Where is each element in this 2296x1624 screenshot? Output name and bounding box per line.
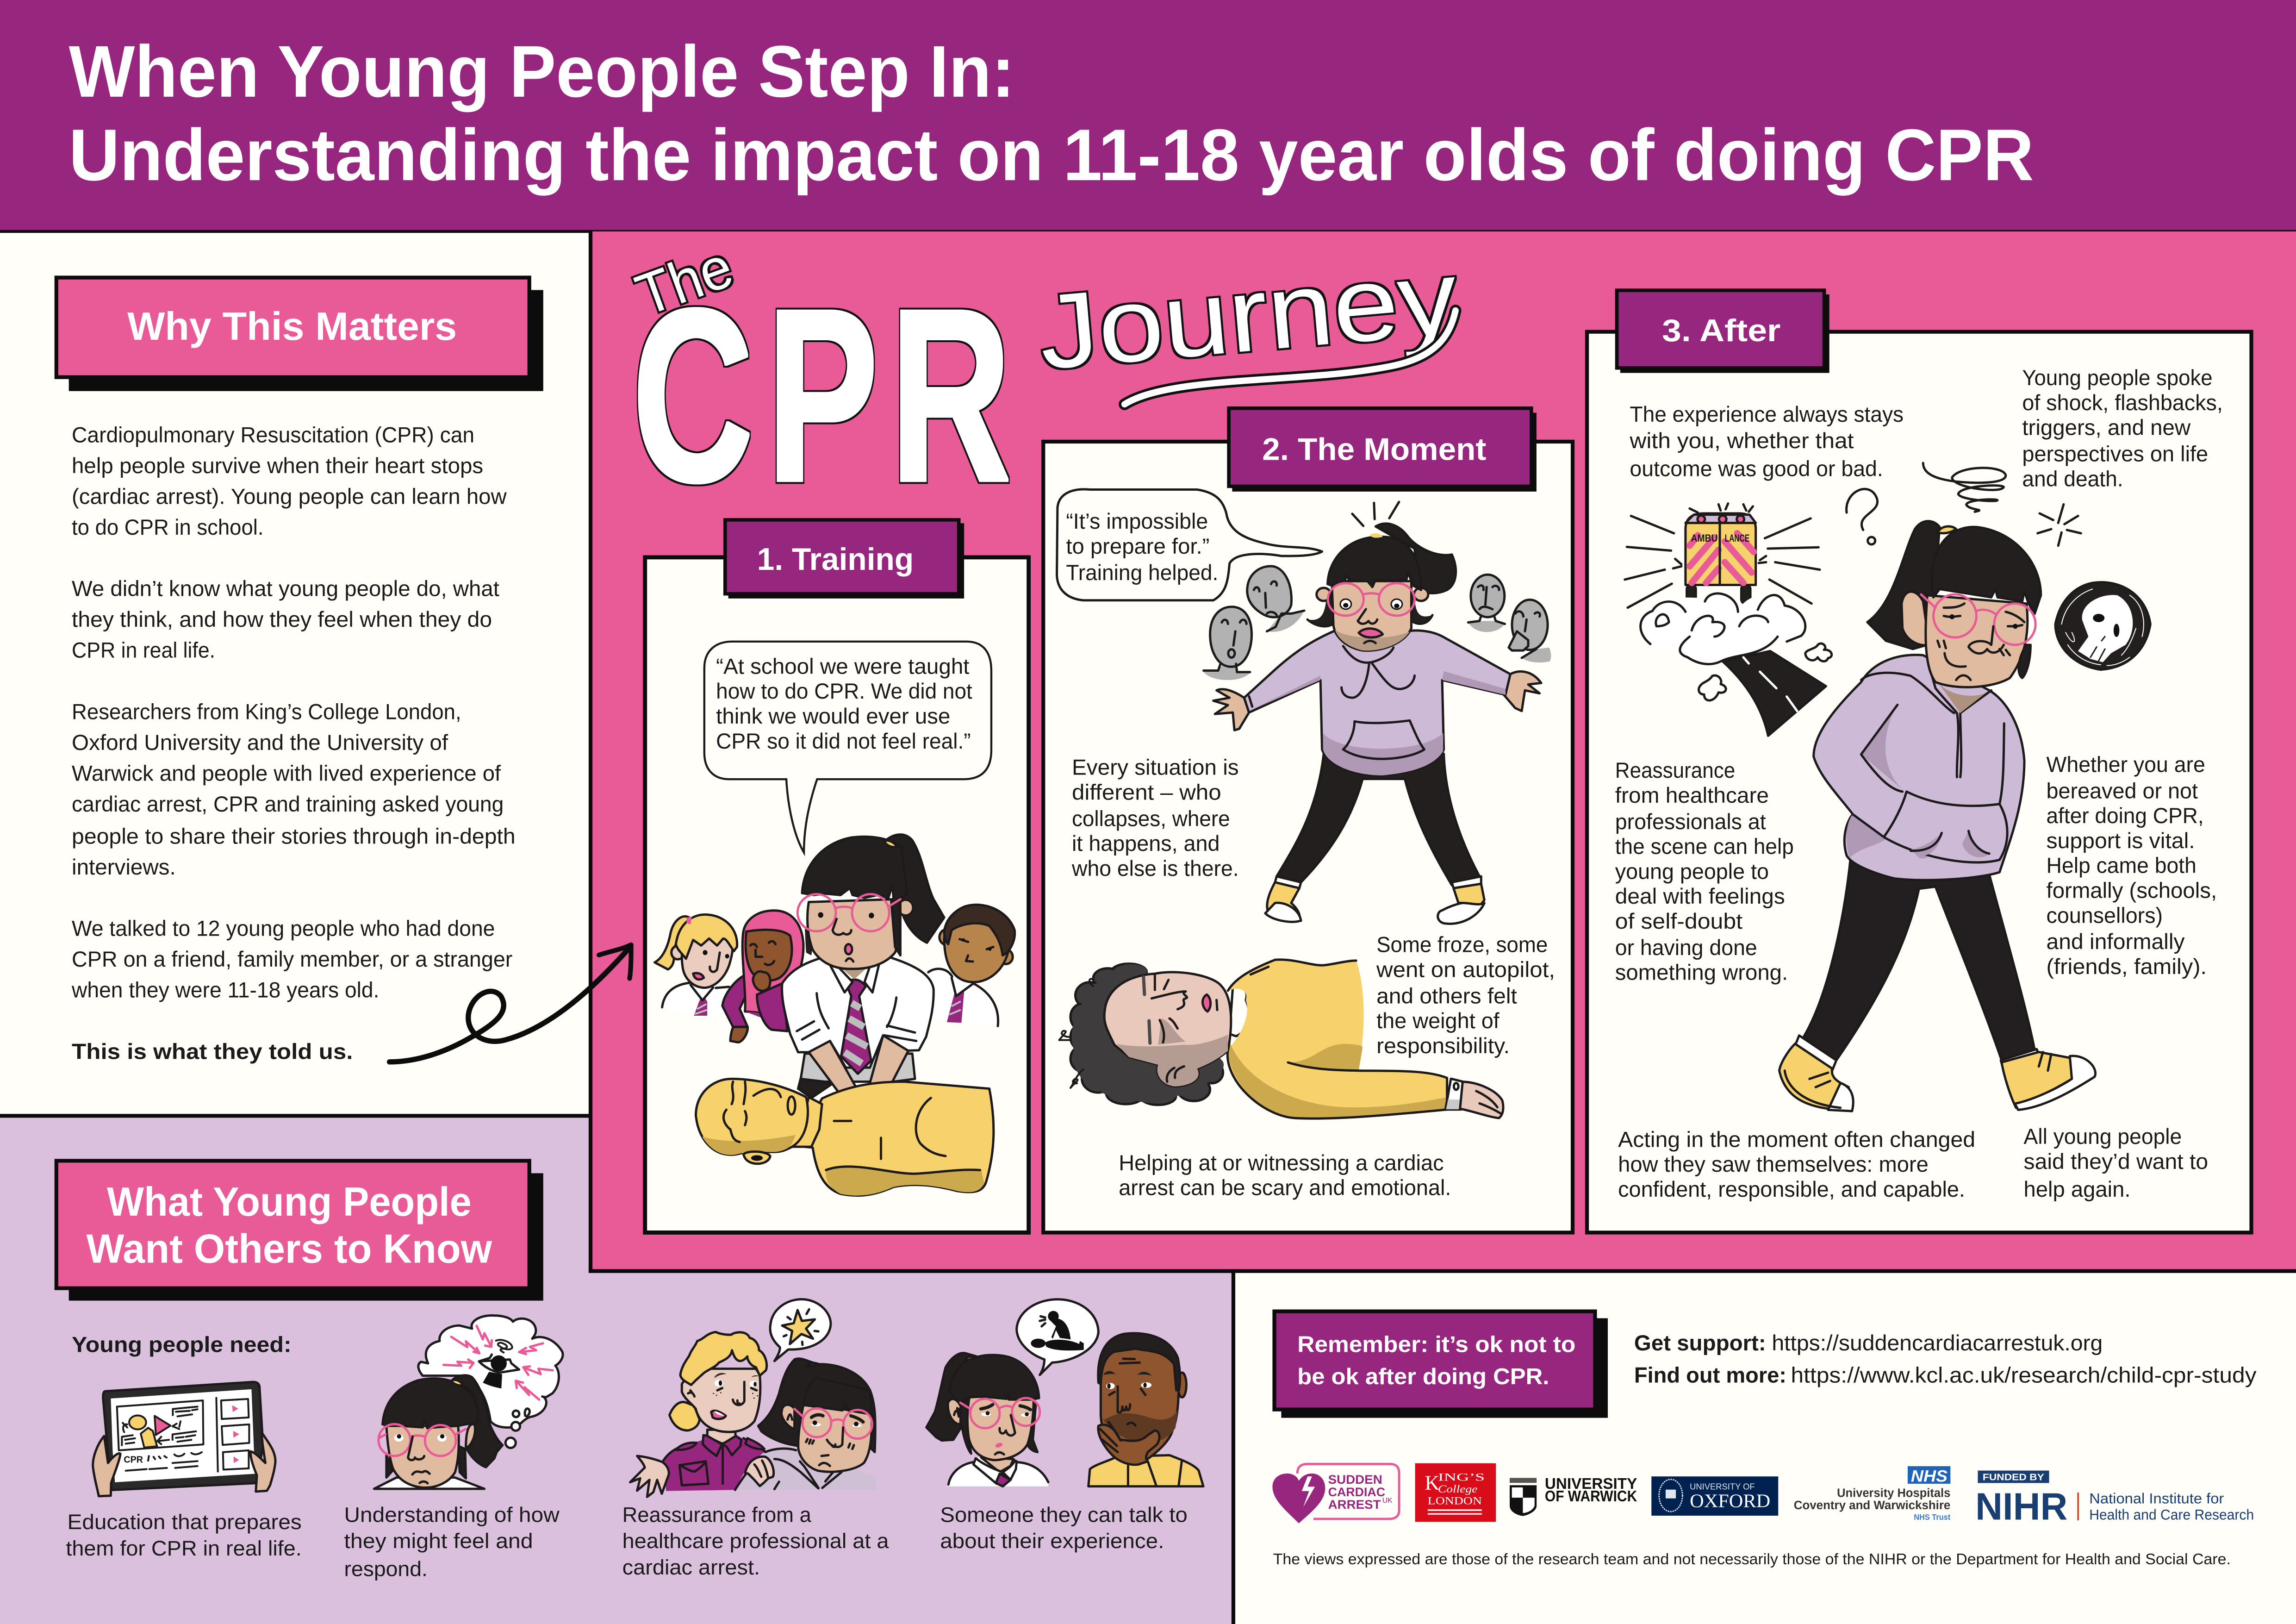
text: shock and flashbacks: perspectives on life [2022,442,2208,467]
logo: nihr [1975,1471,2254,1528]
icon: sparkle [2038,504,2081,546]
text: experience stays [1629,402,1904,481]
text block: introduction: cardiac arrest, CPR and training asked young [72,792,504,817]
heading: the cpr journey [628,233,1462,533]
icon: tablet with hands: CPR [124,1455,143,1465]
speech bubble: at school: CPR so it did not feel real.” [716,729,971,754]
panel: cpr journey [589,230,2296,1624]
text: every situation: different – who [1072,781,1221,805]
label: training: 1. Training [757,542,914,577]
text: shock and flashbacks [2022,366,2223,491]
text: shock and flashbacks: triggers, and new [2022,416,2191,440]
text block: introduction [71,423,516,1064]
text block: introduction: help people survive when their heart stops [72,454,483,478]
speech bubble: at school: think we would ever use [716,704,950,729]
text: acting in the moment: Acting in the moment often changed [1618,1127,1975,1152]
logo: university of oxford: OXFORD [1690,1490,1770,1512]
logo: sudden cardiac arrest uk: CARDIAC [1328,1485,1385,1499]
thought cloud [418,1315,563,1448]
healthcare professional [630,1332,767,1497]
icon: ambulance with cloud and road: AMBU [1691,532,1718,544]
icon: ambulance with cloud and road: LANCE [1725,532,1749,544]
text block: introduction: This is what they told us. [72,1040,353,1064]
card: training [645,520,1029,1232]
text: some froze: and others felt [1376,984,1517,1008]
text: acting in the moment: how they saw themselves: more [1618,1152,1929,1177]
label: the moment [1229,408,1537,492]
logo: nihr: FUNDED BY [1983,1472,2044,1482]
text: helping at or witnessing [1119,1151,1451,1200]
classmate: boy [928,905,1015,1026]
text: reassurance: from healthcare [1615,783,1769,808]
logo: nihr: NIHR [1975,1486,2067,1528]
icon: spiral [1923,463,2006,512]
illustration: girl doing cpr on manikin [655,835,1015,1196]
speech bubble text: Training helped. [1066,561,1218,585]
illustration: walking girl with flashback icons [1625,463,2150,1111]
heading: the cpr journey: Journey [1034,238,1462,392]
icon: skull scribble [2055,582,2150,670]
walking girl figure [1780,521,2096,1111]
caption: reassurance [622,1502,889,1579]
text: support links [1634,1331,2257,1388]
girl being reassured [734,1359,876,1490]
text: some froze [1376,933,1555,1058]
text block: introduction: We didn’t know what young people do, what [72,577,499,601]
logo: university of warwick: UNIVERSITY [1545,1475,1637,1492]
text: acting in the moment [1618,1127,1975,1202]
text: helping at or witnessing: Helping at or witnessing a cardiac [1119,1151,1444,1175]
text: experience stays: with you, whether that [1629,429,1854,453]
text: support is vital: Whether you are [2047,752,2205,777]
text: support is vital: bereaved or not [2047,779,2198,803]
text: every situation: Every situation is [1072,756,1239,780]
classmate: girl in hijab [722,911,803,1043]
speech bubble shape [1057,489,1322,600]
text: want to help again [2024,1124,2208,1202]
text: support is vital [2047,752,2217,979]
heading: what young people want: Want Others to Know [87,1225,492,1271]
logo: nihr: Health and Care Research [2089,1506,2254,1523]
text: some froze: Some froze, some [1376,933,1548,957]
caption: someone to talk to: Someone they can talk to [940,1502,1188,1526]
logo: university of warwick [1510,1475,1637,1516]
heading: the cpr journey: CPR [632,258,1011,533]
text: reassurance: of self-doubt [1615,909,1742,934]
logo: kings college london: K [1425,1472,1439,1494]
logo: kings college london [1415,1463,1496,1522]
text: every situation: who else is there. [1071,856,1239,881]
text: reassurance: deal with feelings [1615,884,1785,909]
header banner [0,0,2296,234]
panel: what young people want others to know [0,1114,1233,1624]
logo: nhs university hospitals: NHS [1911,1468,1948,1486]
caption: someone to talk to [940,1502,1188,1553]
caption: understanding: respond. [344,1556,428,1580]
caption: reassurance: Reassurance from a [622,1502,811,1526]
text: support links: Find out more: [1634,1363,1786,1388]
text block: introduction: CPR on a friend, family member, or a stranger [72,947,513,972]
text block: introduction: Researchers from King’s College London, [72,700,461,724]
speech bubble with star [770,1299,831,1361]
text block: introduction: people to share their stories through in-depth [72,824,516,849]
heading: why this matters [56,278,543,391]
label: training [725,520,964,599]
illustration: person collapsed on floor [1059,960,1503,1118]
logo: kings college london: College [1438,1483,1477,1495]
text: support is vital: support is vital. [2047,829,2195,853]
text: support links: https://www.kcl.ac.uk/research/child-cpr-study [1791,1363,2257,1388]
text: every situation [1071,756,1239,881]
illustration: shocked girl with bystanders [1057,489,1551,924]
callout: remember: be ok after doing CPR. [1297,1364,1549,1389]
logo: sudden cardiac arrest uk [1272,1464,1399,1523]
bystanders [1202,566,1551,680]
icon: girl with thought cloud [374,1315,563,1489]
cpr manikin [696,1079,994,1196]
caption: education: Education that prepares [68,1510,302,1534]
text: support is vital: (friends, family). [2047,955,2207,979]
girl [927,1353,1048,1487]
text: reassurance: or having done [1615,936,1757,960]
text: helping at or witnessing: arrest can be scary and emotional. [1119,1176,1451,1200]
text: every situation: collapses, where [1072,806,1230,831]
caption: education [66,1510,302,1560]
text block: introduction: Cardiopulmonary Resuscitation (CPR) can [72,423,474,448]
text block: introduction: when they were 11-18 years old. [71,978,379,1003]
text block: introduction: Warwick and people with lived experience of [72,761,501,786]
caption: understanding: they might feel and [344,1529,533,1553]
icon: healthcare professional reassuring girl [630,1299,876,1497]
text: experience stays: outcome was good or bad. [1630,456,1883,481]
text: reassurance: professionals at [1615,810,1766,834]
text: shock and flashbacks: Young people spoke [2022,366,2213,390]
text block: introduction: CPR in real life. [72,638,215,663]
title [69,31,2034,196]
man [1089,1333,1203,1487]
text: want to help again: said they’d want to [2024,1149,2208,1174]
logo: kings college london: ING’S [1438,1472,1485,1484]
logo: kings college london: LONDON [1428,1495,1482,1507]
icon: girl talking with man [927,1299,1203,1487]
logo: university of oxford [1651,1476,1778,1516]
logo: nhs university hospitals: University Hospitals [1837,1487,1950,1500]
text: support links: https://suddencardiacarrestuk.org [1772,1331,2103,1355]
text: support is vital: after doing CPR, [2047,804,2204,828]
text: shock and flashbacks: and death. [2022,467,2123,491]
panel: remember and support [1272,1312,2257,1568]
text: support is vital: Help came both [2047,854,2196,878]
text: reassurance: something wrong. [1615,961,1788,985]
callout: remember [1275,1312,1608,1418]
text: reassurance: young people to [1615,859,1769,884]
speech bubble: at school [704,642,991,852]
text: want to help again: help again. [2024,1177,2130,1202]
logo: sudden cardiac arrest uk: SUDDEN [1328,1472,1382,1487]
text block: introduction: they think, and how they feel when they do [72,607,492,632]
logo: nhs university hospitals: Coventry and Warwickshire [1794,1499,1950,1512]
caption: reassurance: healthcare professional at a [622,1529,889,1553]
text: experience stays: The experience always stays [1630,402,1904,427]
figure [1213,524,1541,924]
caption: understanding [344,1502,560,1580]
speech bubble text [1066,509,1218,585]
label: the moment: 2. The Moment [1262,431,1486,467]
text: reassurance: the scene can help [1615,835,1794,859]
caption: reassurance: cardiac arrest. [622,1555,760,1579]
caption: education: them for CPR in real life. [66,1536,302,1560]
card: after [1587,290,2252,1232]
text: disclaimer: The views expressed are those of the research team and not necessarily those of the NIHR or the Department for Health and Social Care. [1273,1551,2231,1568]
text: some froze: responsibility. [1376,1034,1510,1058]
callout: remember: Remember: it’s ok not to [1297,1332,1575,1357]
speech bubble text: to prepare for.” [1066,534,1209,559]
speech bubble with cpr figure [1017,1299,1098,1375]
logo: nhs university hospitals [1794,1466,1950,1522]
text: reassurance: Reassurance [1615,758,1735,783]
logo: nhs university hospitals: NHS Trust [1914,1512,1950,1522]
text: want to help again: All young people [2024,1124,2182,1149]
logo: nihr: National Institute for [2089,1490,2224,1507]
label: after [1617,290,1829,373]
label: after: 3. After [1662,313,1780,348]
text block: introduction: We talked to 12 young people who had done [72,917,495,941]
title: Understanding the impact on 11-18 year olds of doing CPR [69,114,2034,196]
heading: what young people want: What Young People [107,1179,472,1224]
text: acting in the moment: confident, responsible, and capable. [1618,1177,1965,1202]
text: reassurance [1615,758,1794,985]
main girl [782,835,944,1132]
logo: university of oxford: UNIVERSITY OF [1690,1482,1755,1492]
subheading: young people need: Young people need: [72,1332,292,1357]
logo: university of warwick: OF WARWICK [1545,1487,1637,1505]
text: every situation: it happens, and [1072,831,1220,856]
title: When Young People Step In: [69,31,1015,112]
arrow: from text to journey [390,945,631,1062]
caption: someone to talk to: about their experience. [940,1529,1164,1553]
text: shock and flashbacks: of shock, flashbacks, [2022,391,2223,415]
text block: introduction: Oxford University and the University of [72,731,448,755]
icon: question mark [1847,489,1878,544]
text block: introduction: interviews. [72,855,176,880]
logo: sudden cardiac arrest uk: ARREST [1328,1497,1381,1512]
speech bubble: at school: “At school we were taught [716,654,970,679]
icon: tablet with hands [93,1382,275,1496]
text: support is vital: and informally [2047,930,2185,954]
classmate: blonde girl [655,915,737,1016]
caption: understanding: Understanding of how [344,1502,560,1526]
text: support links: Get support: [1634,1331,1766,1355]
speech bubble: at school: how to do CPR. We did not [716,679,972,704]
text block: introduction: (cardiac arrest). Young people can learn how [72,484,507,509]
text: support is vital: counsellors) [2047,903,2163,928]
heading: what young people want [56,1161,543,1301]
logo: sudden cardiac arrest uk: UK [1382,1497,1393,1505]
heading: the cpr journey: The [628,233,741,328]
text block: introduction: to do CPR in school. [72,515,264,540]
speech bubble text: “It’s impossible [1066,509,1208,534]
card: the moment [1043,408,1573,1232]
icon: ambulance with cloud and road [1625,504,1832,736]
panel: why this matters [0,233,590,1116]
text: some froze: the weight of [1376,1009,1500,1033]
heading: why this matters: Why This Matters [127,305,457,349]
text: some froze: went on autopilot, [1376,957,1555,982]
text: support is vital: formally (schools, [2047,878,2217,903]
